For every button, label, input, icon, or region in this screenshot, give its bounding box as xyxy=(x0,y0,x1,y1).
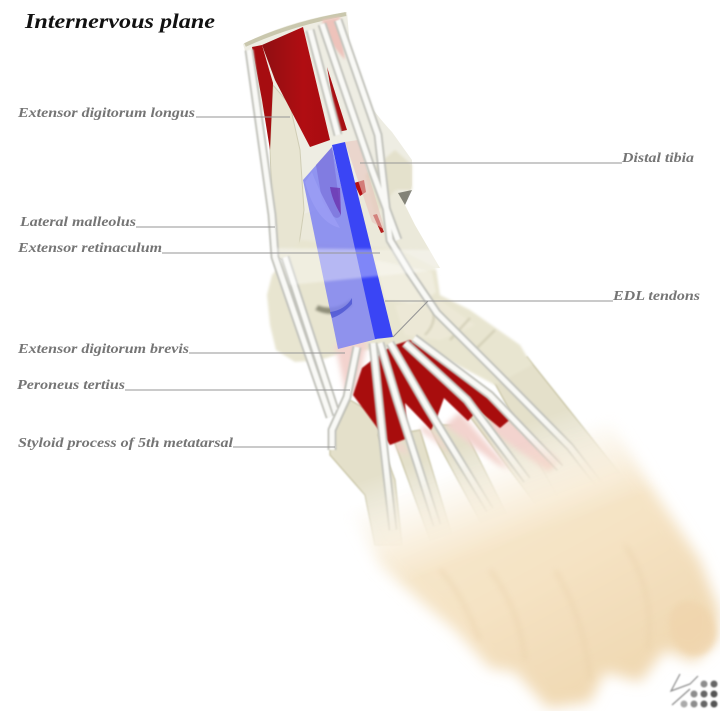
translucent plane xyxy=(303,147,377,349)
extensor digitorum brevis xyxy=(353,340,512,445)
medial muscle sliver xyxy=(327,67,347,132)
leg bones and soft tissue xyxy=(243,12,440,275)
first metatarsal xyxy=(494,356,609,476)
label: peroneus tertius: Peroneus tertius xyxy=(17,378,126,393)
lateral muscle belly xyxy=(252,45,273,150)
ankle joint fill xyxy=(290,185,440,275)
label: extensor digitorum longus: Extensor digitorum longus xyxy=(17,106,196,121)
extensor retinaculum xyxy=(275,248,440,285)
medial malleolus xyxy=(365,150,412,215)
label: extensor retinaculum: Extensor retinaculum xyxy=(17,241,162,256)
label: extensor digitorum brevis: Extensor digitorum brevis xyxy=(17,342,190,357)
fibula and lateral malleolus xyxy=(270,85,304,261)
muscle tails pink xyxy=(335,340,560,472)
label: styloid process: Styloid process of 5th metatarsal xyxy=(18,436,233,451)
label: EDL tendons: EDL tendons xyxy=(612,289,701,304)
title: Internervous plane xyxy=(24,9,215,33)
label: lateral malleolus: Lateral malleolus xyxy=(19,215,137,230)
blue plane xyxy=(303,142,393,349)
second metatarsal xyxy=(470,413,546,490)
solid blue strip xyxy=(332,142,393,339)
fifth metatarsal xyxy=(330,400,402,545)
extensor digitorum longus belly xyxy=(262,27,330,147)
tibia and soft tissue xyxy=(243,12,412,230)
pink muscle top xyxy=(322,17,345,60)
fourth metatarsal xyxy=(394,428,447,526)
metatarsal bones xyxy=(330,357,625,545)
foot skin and toes xyxy=(345,420,720,708)
leader lines xyxy=(125,117,622,447)
top cut edge xyxy=(245,14,346,45)
distal muscle fragments xyxy=(354,180,366,196)
third metatarsal xyxy=(428,424,499,509)
tendons xyxy=(249,20,615,530)
muscles xyxy=(252,17,560,472)
signature logo xyxy=(671,674,718,708)
tarsal bones xyxy=(267,240,532,385)
label: distal tibia: Distal tibia xyxy=(621,151,694,166)
darker shaded fold xyxy=(316,147,341,218)
